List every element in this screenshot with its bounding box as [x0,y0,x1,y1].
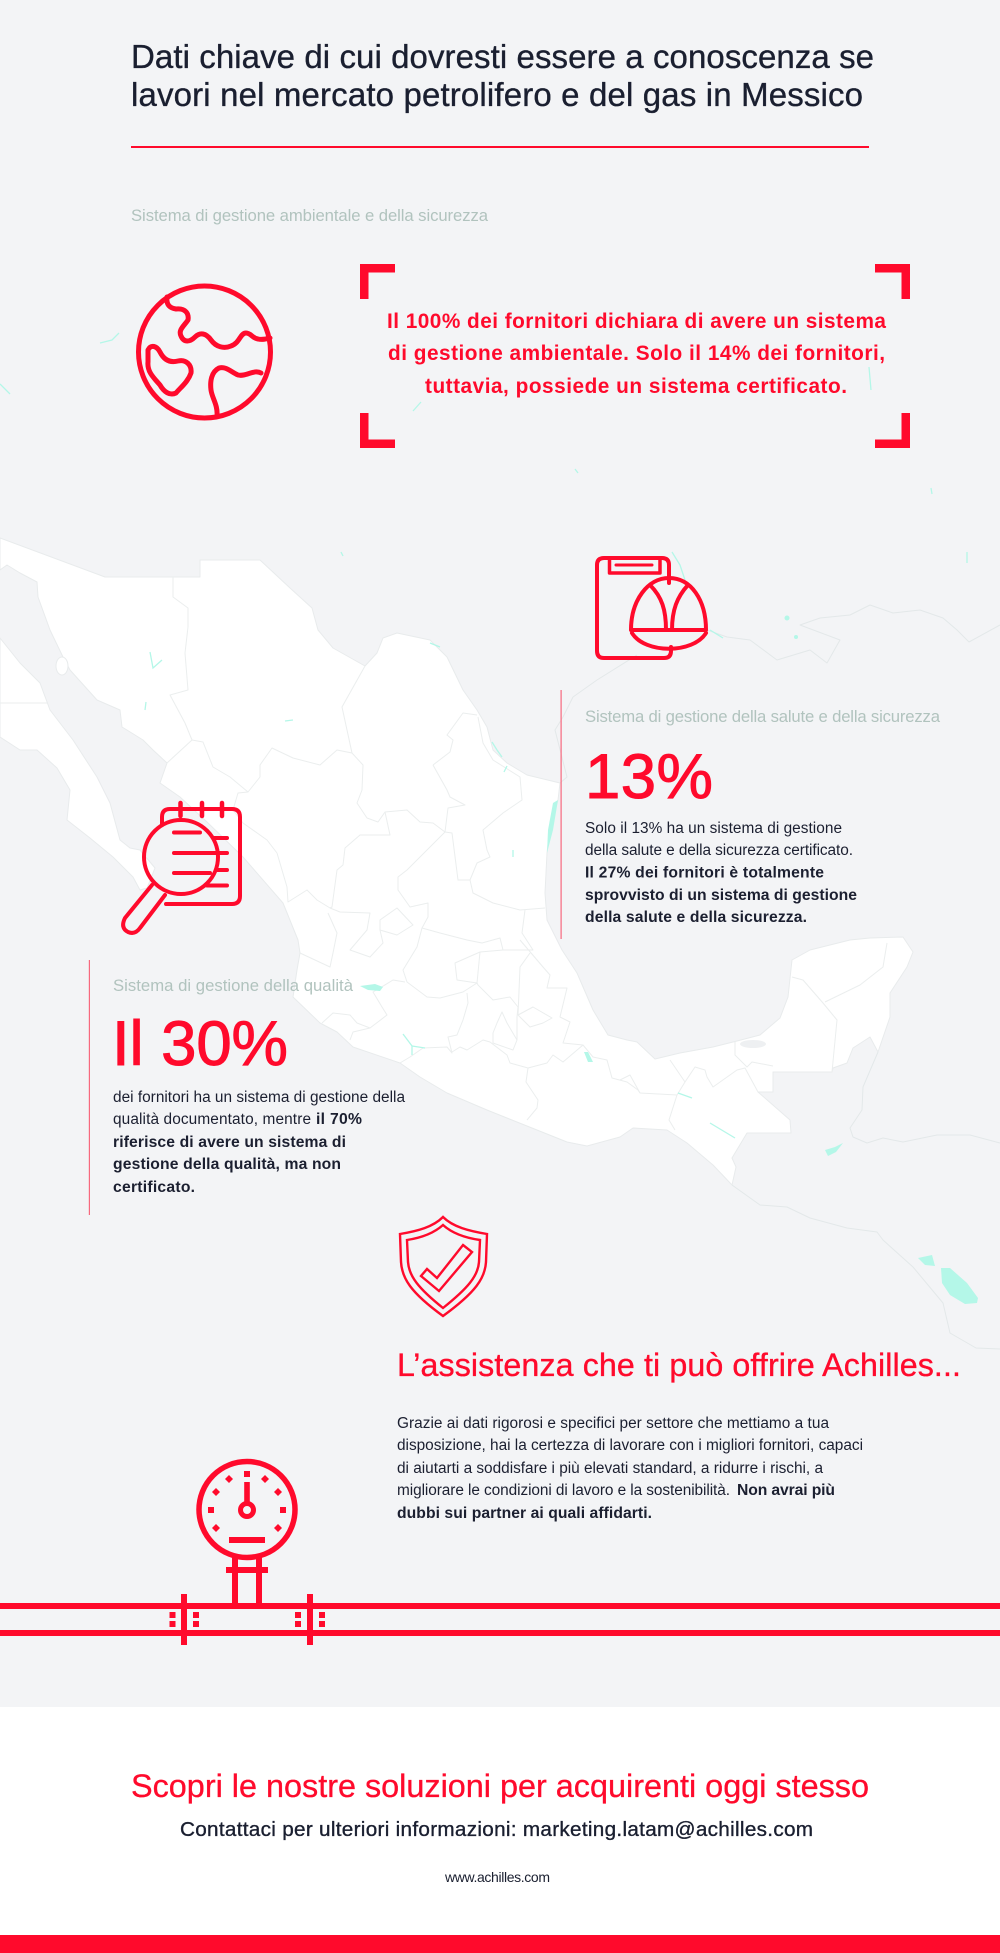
panel: health and safety [560,690,941,939]
heading: Sistema di gestione della qualità [113,976,354,995]
body text [113,1089,405,1196]
text block: Achilles assistance: dubbi sui partner ai quali affidarti. [397,1505,652,1522]
body text: il 70% [316,1111,362,1128]
body text: gestione della qualità, ma non [113,1156,341,1173]
callout: environmental statement [360,264,910,448]
text block: Achilles assistance: Non avrai più [737,1482,835,1499]
body text: certificato. [113,1179,195,1196]
footer panel [0,1707,1000,1935]
text block: Achilles assistance: migliorare le condizioni di lavoro e la sostenibilità. [397,1482,730,1499]
body text: sprovvisto di un sistema di gestione [585,887,857,904]
title: lavori nel mercato petrolifero e del gas in Messico [131,76,863,113]
title: Dati chiave di cui dovresti essere a conoscenza se [131,38,874,75]
body text [585,820,857,926]
panel: quality management [89,960,405,1215]
stat: 13%: 13% [585,742,713,812]
footer bar [0,1935,1000,1953]
call to action heading: Scopri le nostre soluzioni per acquirenti oggi stesso [131,1768,869,1804]
pipeline [0,1594,1000,1645]
body text: qualità documentato, mentre [113,1111,311,1128]
icon: shield with check [400,1217,487,1316]
body text: Il 27% dei fornitori è totalmente [585,864,824,882]
icon: globe [138,286,270,418]
map of Mexico [0,333,1000,1349]
contact line: Contattaci per ulteriori informazioni: marketing.latam@achilles.com [180,1818,813,1841]
callout text: tuttavia, possiede un sistema certificato. [425,375,847,398]
callout text: di gestione ambientale. Solo il 14% dei fornitori, [388,342,885,365]
text block: Achilles assistance: Grazie ai dati rigorosi e specifici per settore che mettiamo a tua [397,1415,829,1432]
body text: Solo il 13% ha un sistema di gestione [585,820,842,837]
stat: Il 30%: Il 30% [112,1009,288,1079]
title rule [131,146,869,148]
body text: della salute e della sicurezza certificato. [585,842,853,859]
callout text: Il 100% dei fornitori dichiara di avere un sistema [387,310,886,333]
brackets [360,264,910,448]
gauge stem [226,1557,268,1603]
body text: dei fornitori ha un sistema di gestione della [113,1089,405,1106]
body text: della salute e della sicurezza. [585,909,807,926]
heading: Sistema di gestione della salute e della sicurezza [585,707,941,726]
text block: Achilles assistance [397,1415,863,1522]
text block: Achilles assistance: disposizione, hai la certezza di lavorare con i migliori fornitori, capaci [397,1437,863,1454]
heading: environmental management: Sistema di gestione ambientale e della sicurezza [131,206,489,225]
body text: riferisce di avere un sistema di [113,1134,346,1151]
heading: Achilles assistance: L’assistenza che ti può offrire Achilles... [397,1347,961,1383]
text block: Achilles assistance: di aiutarti a soddisfare i più elevati standard, a ridurre i rischi, a [397,1460,823,1477]
title [131,38,874,113]
icon: notepad and magnifier [123,803,240,933]
callout text [387,310,886,398]
icon: pressure gauge and pipeline [0,1462,1000,1645]
gauge dial [199,1462,295,1558]
icon: clipboard and hard hat [597,558,706,658]
website: www.achilles.com [444,1869,550,1885]
